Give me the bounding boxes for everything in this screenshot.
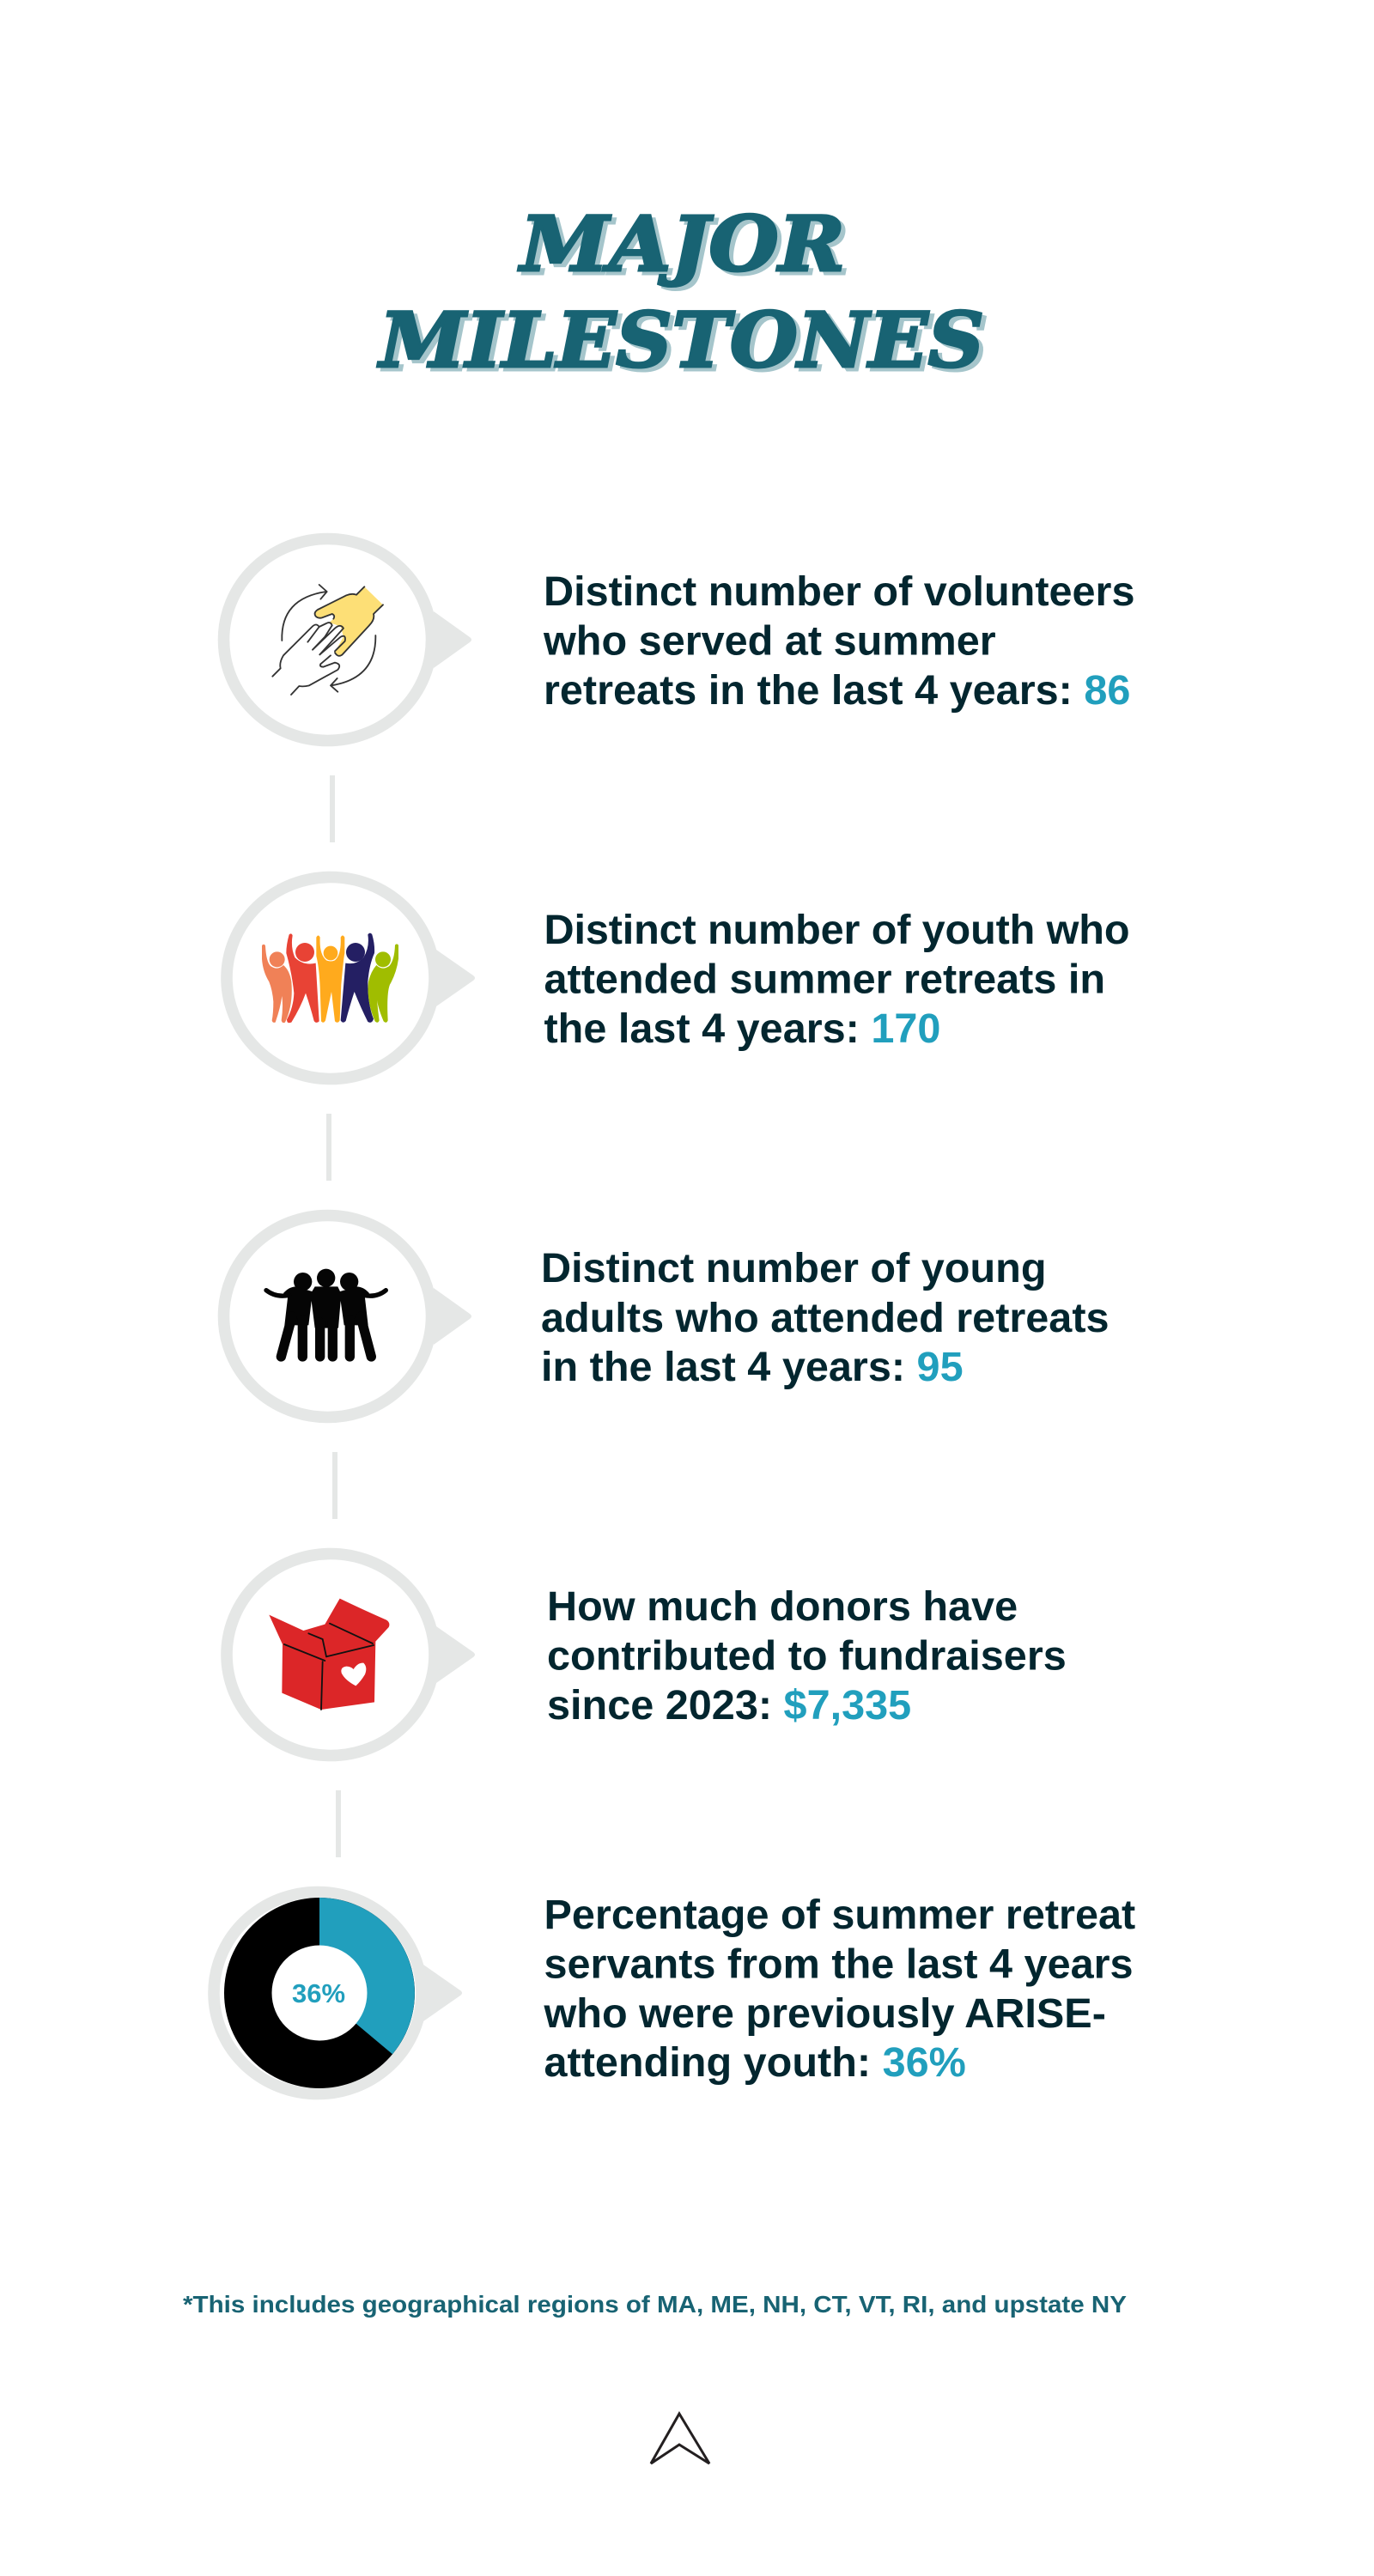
- milestone 4: donors: [227, 1554, 1067, 1755]
- text: youth: the last 4 years: 170: [544, 1005, 940, 1052]
- footnote: *This includes geographical regions of MA, ME, NH, CT, VT, RI, and upstate NY: [183, 2291, 1127, 2318]
- speech bubble ring 2: [227, 878, 475, 1078]
- icon: helping hands: [272, 585, 383, 695]
- text: donors: since 2023: $7,335: [547, 1682, 911, 1728]
- title: MILESTONES: [381, 299, 988, 388]
- connector lines: [326, 775, 341, 1857]
- speech bubble ring 1: [223, 539, 471, 740]
- milestone 1: volunteers: [223, 539, 1135, 740]
- speech bubble ring 5: [214, 1893, 462, 2093]
- speech bubble ring 3: [223, 1216, 471, 1417]
- icon: logo arrow: [651, 2414, 709, 2464]
- text: percentage: who were previously ARISE-: [543, 1990, 1106, 2037]
- text: volunteers: Distinct number of volunteers: [544, 568, 1135, 615]
- text: young adults: in the last 4 years: 95: [541, 1344, 964, 1390]
- milestone 3: young adults: [223, 1216, 1110, 1417]
- title: MAJOR: [522, 203, 849, 292]
- title: MAJOR: [518, 199, 845, 289]
- text: percentage: attending youth: 36%: [544, 2039, 966, 2086]
- title: [377, 199, 988, 388]
- text: donors: contributed to fundraisers: [547, 1633, 1067, 1680]
- title: MILESTONES: [377, 295, 984, 385]
- text: volunteers: who served at summer: [543, 618, 996, 665]
- text: percentage: Percentage of summer retreat: [544, 1892, 1135, 1938]
- donut chart: 36%: 36%: [292, 1978, 345, 2008]
- text: young adults: adults who attended retreats: [541, 1295, 1110, 1341]
- text: volunteers: retreats in the last 4 years: 86: [544, 667, 1130, 714]
- icon: five people with raised arms: [262, 933, 398, 1023]
- icon: three people embracing: [266, 1269, 386, 1357]
- speech bubble ring 4: [227, 1554, 475, 1755]
- donut chart: 36%: [224, 1898, 415, 2088]
- milestone 2: youth: [227, 878, 1130, 1078]
- text: youth: Distinct number of youth who: [544, 907, 1130, 953]
- text: donors: How much donors have: [547, 1583, 1018, 1630]
- icon: red gift box with heart: [269, 1599, 389, 1710]
- milestone 5: percentage: [214, 1892, 1135, 2093]
- text: young adults: Distinct number of young: [541, 1245, 1047, 1291]
- text: percentage: servants from the last 4 years: [544, 1941, 1134, 1987]
- text: youth: attended summer retreats in: [544, 957, 1105, 1003]
